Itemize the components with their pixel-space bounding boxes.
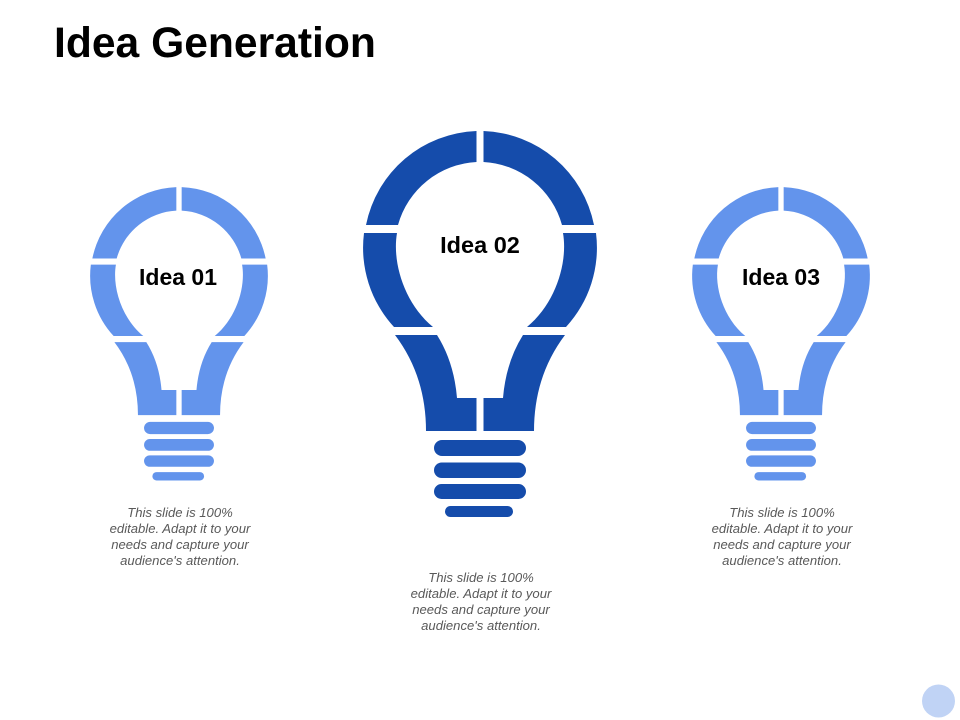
page marker circle xyxy=(922,684,955,718)
label: Idea 01: Idea 01 xyxy=(139,264,217,290)
label: Idea 03: Idea 03 xyxy=(742,264,820,290)
text block: Idea 01 description: audience's attention. xyxy=(120,553,240,568)
text block: Idea 02 description: audience's attention. xyxy=(421,618,541,633)
text block: Idea 01 description: needs and capture your xyxy=(111,537,249,552)
text block: Idea 03 description: editable. Adapt it to your xyxy=(712,521,852,536)
text block: Idea 02 description xyxy=(411,570,552,633)
text block: Idea 01 description xyxy=(110,505,251,568)
bulb: Idea 01 xyxy=(90,187,268,480)
text block: Idea 03 description: This slide is 100% xyxy=(729,505,835,520)
bulb: Idea 02 xyxy=(363,131,597,517)
label: Idea 02: Idea 02 xyxy=(440,232,520,258)
text block: Idea 03 description xyxy=(712,505,853,568)
text block: Idea 03 description: audience's attention. xyxy=(722,553,842,568)
title: Idea Generation xyxy=(54,19,376,67)
text block: Idea 01 description: This slide is 100% xyxy=(127,505,233,520)
text block: Idea 01 description: editable. Adapt it to your xyxy=(110,521,250,536)
bulb: Idea 03 xyxy=(692,187,870,480)
text block: Idea 02 description: This slide is 100% xyxy=(428,570,534,585)
text block: Idea 02 description: needs and capture your xyxy=(412,602,550,617)
text block: Idea 03 description: needs and capture your xyxy=(713,537,851,552)
text block: Idea 02 description: editable. Adapt it to your xyxy=(411,586,551,601)
